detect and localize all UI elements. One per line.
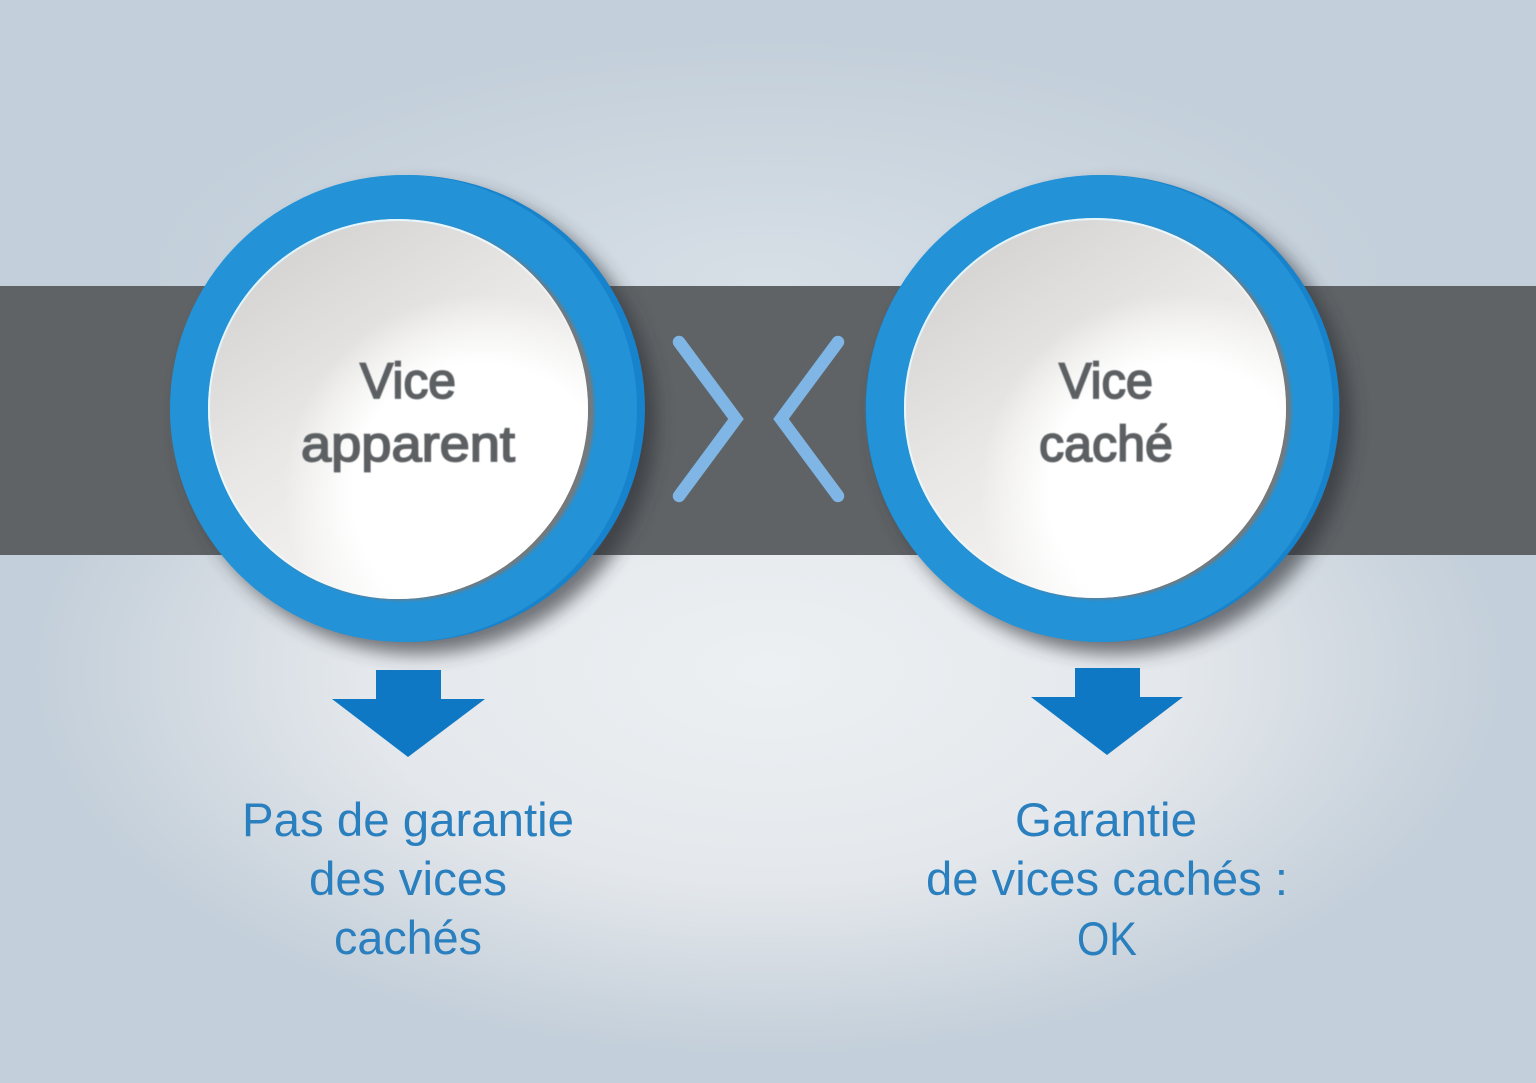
left circle: Vice apparent	[170, 175, 656, 654]
arrow right	[1031, 668, 1183, 755]
text: Pas de garantie des vices cachés: cachés	[334, 911, 482, 964]
label: Vice apparent	[301, 353, 515, 472]
label: Vice apparent: Vice	[360, 353, 456, 409]
label: Vice caché	[1039, 353, 1173, 472]
white disc	[208, 219, 594, 600]
white disc	[904, 218, 1291, 599]
text: Garantie de vices cachés : OK: de vices cachés :	[926, 852, 1288, 905]
label: Vice caché: Vice	[1059, 353, 1153, 409]
dark horizontal band	[0, 286, 1536, 555]
blue ring	[866, 175, 1351, 654]
label: Vice caché: caché	[1039, 416, 1173, 472]
arrow left	[332, 670, 485, 757]
text: Garantie de vices cachés : OK: Garantie	[1015, 793, 1197, 846]
blue ring	[170, 175, 656, 654]
text: Pas de garantie des vices cachés: Pas de garantie	[242, 793, 574, 846]
text: Garantie de vices cachés : OK	[926, 793, 1288, 965]
text: Pas de garantie des vices cachés: des vices	[309, 852, 507, 905]
label: Vice apparent: apparent	[301, 416, 515, 472]
text: Pas de garantie des vices cachés	[242, 793, 574, 964]
right circle: Vice caché	[866, 175, 1351, 654]
chevron left	[781, 342, 838, 496]
text: Garantie de vices cachés : OK: OK	[1077, 912, 1137, 965]
chevron right	[679, 342, 736, 496]
